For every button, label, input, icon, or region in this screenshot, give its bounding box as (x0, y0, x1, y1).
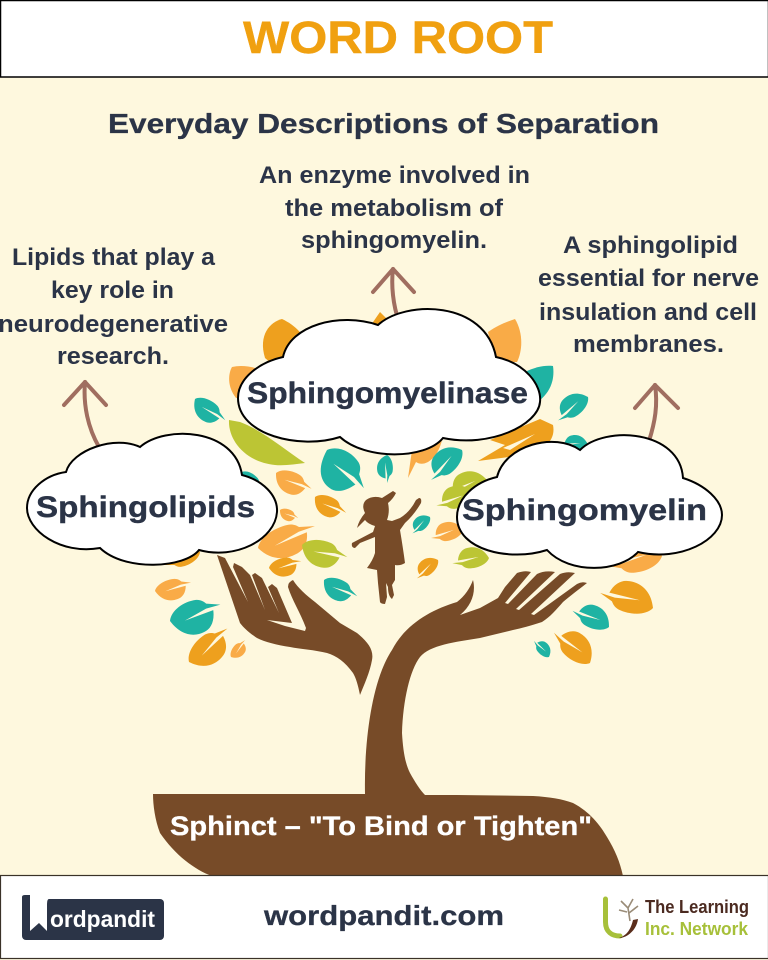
logo: wordpandit: ordpandit (50, 906, 155, 932)
left hand (217, 555, 372, 695)
footer website: wordpandit.com (263, 900, 504, 931)
cloud: Sphingomyelinase (238, 309, 540, 454)
description: sphingomyelin: A sphingolipid (563, 232, 738, 259)
leaves on the tree (153, 312, 664, 676)
title: WORD ROOT (243, 12, 553, 63)
cloud label: Sphingomyelin (462, 494, 707, 527)
description: sphingomyelinase: An enzyme involved in (259, 162, 530, 189)
tree trunk, right hand and soil (153, 571, 623, 876)
description: sphingolipids (0, 244, 228, 370)
description: sphingolipids: Lipids that play a (12, 244, 216, 271)
description: sphingomyelinase (259, 162, 530, 254)
description: sphingolipids: key role in (51, 277, 174, 304)
child silhouette (352, 491, 421, 604)
cloud label: Sphingolipids (36, 491, 255, 524)
cloud label: Sphingomyelinase (247, 377, 528, 410)
arrow: center (373, 269, 414, 322)
description: sphingomyelin: essential for nerve (538, 265, 759, 292)
description: sphingomyelin: insulation and cell (539, 299, 757, 326)
description: sphingomyelin (538, 232, 759, 358)
subtitle: Everyday Descriptions of Separation (108, 108, 659, 139)
logo: The Learning Inc. Network: The Learning (645, 897, 749, 917)
root label: Sphinct – "To Bind or Tighten" (170, 811, 592, 841)
arrow: left (64, 382, 106, 447)
description: sphingomyelinase: sphingomyelin. (301, 227, 487, 254)
description: sphingomyelin: membranes. (573, 331, 724, 358)
header band (0, 0, 768, 77)
footer band (0, 876, 768, 958)
cloud: Sphingomyelin (457, 435, 722, 568)
description: sphingolipids: research. (57, 343, 169, 370)
logo: The Learning Inc. Network (606, 897, 749, 939)
logo: The Learning Inc. Network: Inc. Network (645, 919, 749, 939)
cloud: Sphingolipids (27, 434, 277, 565)
description: sphingomyelinase: the metabolism of (285, 195, 504, 222)
description: sphingolipids: neurodegenerative (0, 311, 228, 338)
logo: wordpandit (22, 895, 164, 940)
arrow: right (635, 385, 678, 441)
